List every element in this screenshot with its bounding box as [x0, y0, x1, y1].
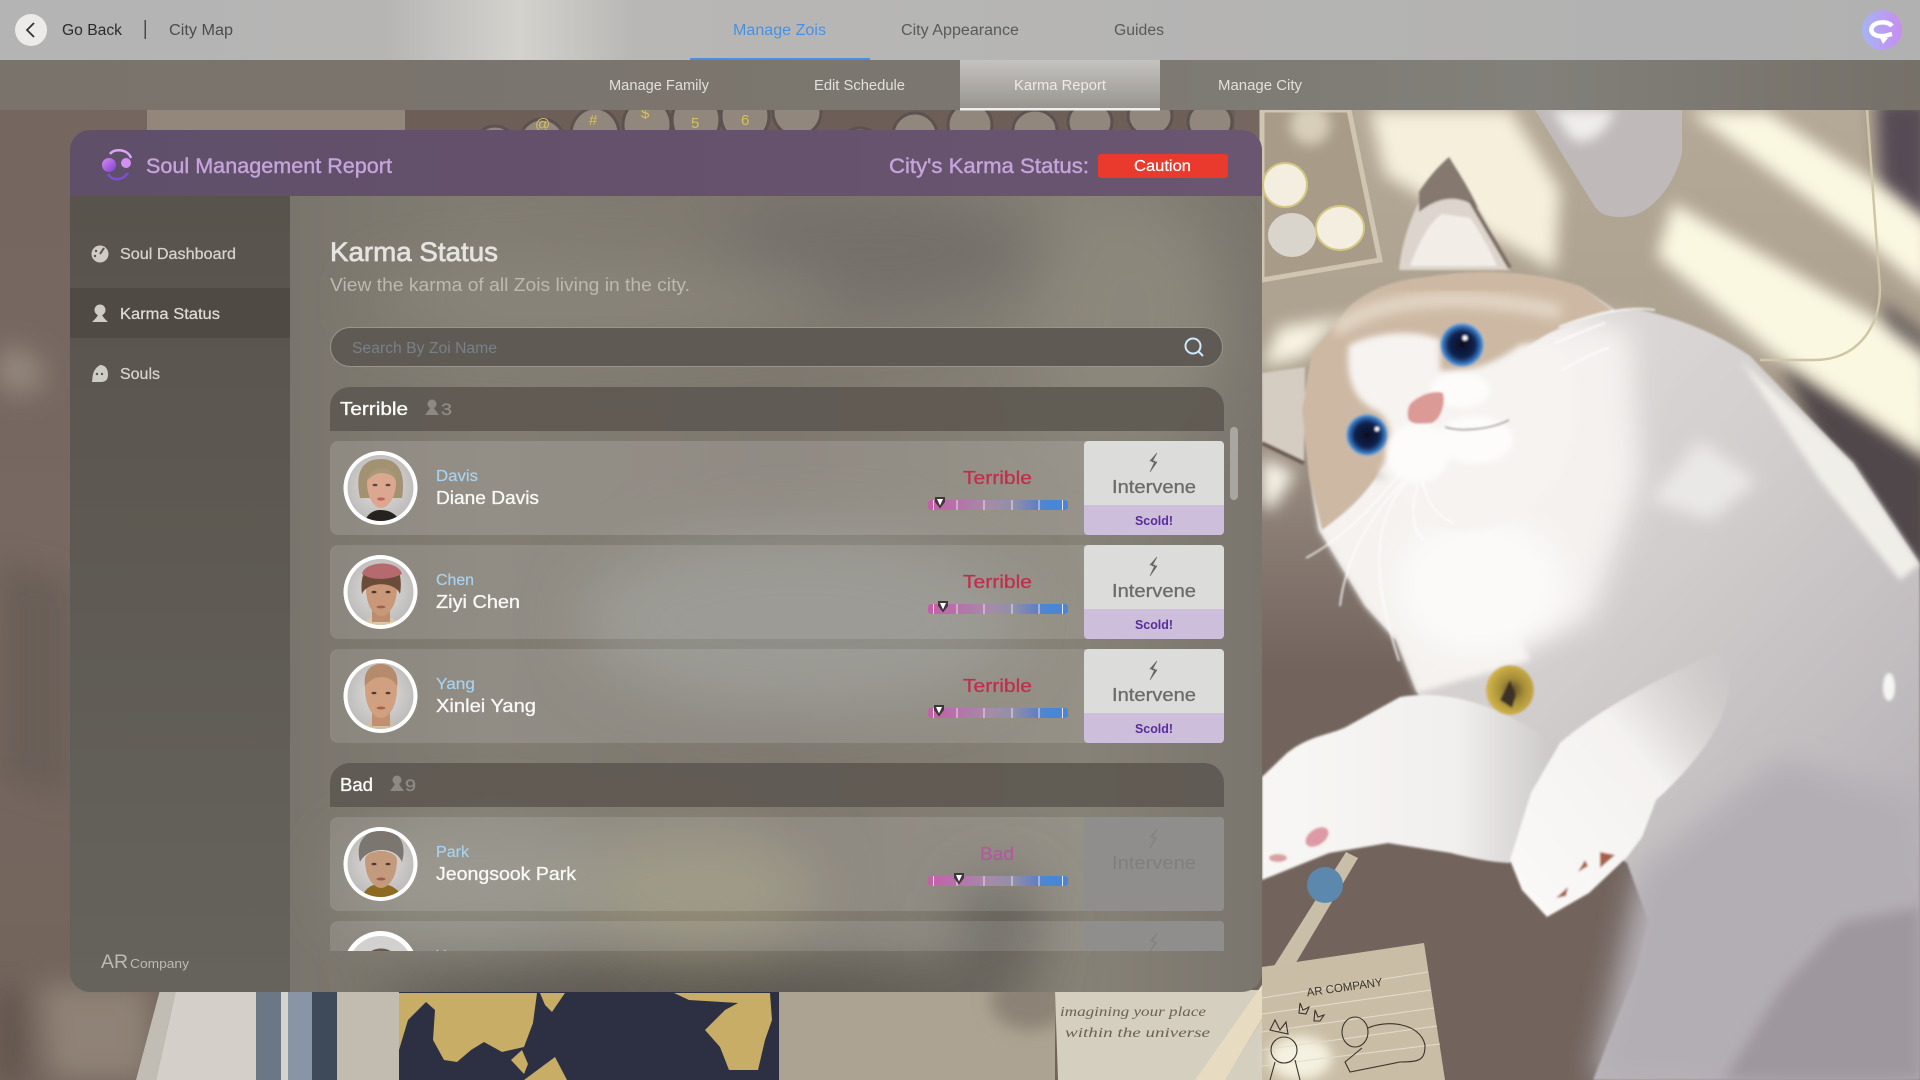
- menu: souls: Souls: [120, 366, 160, 383]
- row: partially visible: [330, 921, 1224, 1015]
- sidebar: [70, 196, 290, 996]
- row: ziyi chen: [330, 545, 1224, 639]
- group header: bad: 9: [405, 776, 416, 795]
- karma label: Bad: [980, 843, 1014, 864]
- disabled intervene button: Intervene: [1112, 852, 1196, 873]
- cat left arm and paw: [1262, 695, 1560, 880]
- karma bar: [928, 497, 1068, 510]
- city map label: City Map: [169, 22, 233, 39]
- intervene button: Intervene: [1112, 580, 1196, 601]
- note with drawing: AR COMPANY: [1306, 977, 1384, 999]
- cat face white: [1348, 333, 1580, 530]
- scrollbar: [1230, 427, 1238, 500]
- right keyboard corner and keys: [1262, 105, 1380, 280]
- top-left keyboard edge: #: [589, 112, 598, 129]
- sub navigation bar: [0, 60, 1920, 110]
- search box: [330, 328, 1222, 366]
- ar company logo: Company: [130, 956, 190, 971]
- menu: soul dashboard: Soul Dashboard: [120, 246, 236, 263]
- row: xinlei yang: [330, 649, 1224, 743]
- row: ziyi chen: Ziyi Chen: [436, 591, 520, 612]
- note with drawing: [1262, 943, 1445, 1080]
- bottom note with handwriting: imagining your place: [1060, 1005, 1206, 1020]
- top-left keyboard edge: [147, 88, 1235, 174]
- menu: karma status: Karma Status: [120, 306, 220, 323]
- pen: [1195, 852, 1358, 1080]
- caution pill: Caution: [1134, 158, 1191, 175]
- avatar: diane: [344, 451, 418, 525]
- intervene button: Scold!: [1135, 618, 1173, 632]
- group header: bad: Bad: [340, 774, 373, 795]
- avatar: ziyi: [344, 555, 418, 629]
- group header: terrible: [330, 387, 1224, 431]
- sub navigation bar: Manage Family: [609, 78, 710, 94]
- avatar: xinlei: [340, 658, 420, 738]
- sunlight stripes: [1262, 110, 1920, 510]
- row: partially visible: Y: [436, 948, 446, 965]
- desk cable: [1760, 110, 1880, 360]
- tab: manage zois: Manage Zois: [733, 22, 826, 39]
- intervene button: Intervene: [1112, 684, 1196, 705]
- top-left keyboard edge: 5: [691, 115, 699, 132]
- cat fur shading: [1593, 360, 1920, 1080]
- active tab highlight: [960, 60, 1160, 110]
- row: xinlei yang: Xinlei Yang: [436, 695, 536, 716]
- search box: Search By Zoi Name: [352, 340, 497, 357]
- report title: Soul Management Report: [146, 154, 392, 178]
- city karma status label: City's Karma Status:: [889, 155, 1089, 178]
- sub navigation bar: Manage City: [1218, 78, 1303, 94]
- app logo: [1862, 10, 1902, 50]
- panel: soul management report: [70, 130, 1262, 1040]
- cat tan mask: [1302, 272, 1612, 530]
- cat chest white: [1315, 310, 1640, 693]
- tab: guides: Guides: [1114, 22, 1164, 39]
- tab: city appearance: City Appearance: [901, 22, 1019, 39]
- right desk surface: [1262, 100, 1920, 1080]
- row: jeongsook park: Jeongsook Park: [436, 863, 577, 884]
- active menu highlight: [70, 288, 290, 338]
- main content background: [290, 140, 1262, 992]
- ar company logo: [101, 954, 189, 970]
- row: jeongsook park: Park: [436, 844, 469, 861]
- computer mouse: [1535, 110, 1682, 217]
- search icon: [1186, 338, 1203, 356]
- group header: terrible: Terrible: [340, 398, 408, 419]
- avatar: jeongsook: [340, 826, 420, 906]
- bottom note with handwriting: [1055, 990, 1262, 1080]
- dark desk shadows: [1660, 100, 1920, 600]
- intervene button: [1084, 649, 1224, 743]
- caution pill: [1098, 154, 1228, 178]
- go back label: Go Back: [62, 22, 122, 39]
- desk light and shadow on the left: [0, 345, 150, 1080]
- cat top ear: [1399, 157, 1510, 270]
- intervene button: Scold!: [1135, 514, 1173, 528]
- heading: karma status: Karma Status: [330, 237, 498, 267]
- row: ziyi chen: Chen: [436, 572, 474, 589]
- intervene button: Scold!: [1135, 722, 1173, 736]
- group header: bad: [330, 763, 1224, 807]
- group header: terrible: 3: [441, 400, 452, 419]
- top-left keyboard edge: $: [641, 105, 650, 122]
- row: diane davis: [330, 441, 1224, 535]
- karma bar: [928, 705, 1068, 718]
- cat right arm and paw: [1510, 650, 1729, 917]
- disabled intervene button: [1084, 817, 1224, 911]
- intervene button: [1084, 545, 1224, 639]
- sub navigation bar: Edit Schedule: [814, 78, 905, 94]
- row: xinlei yang: Yang: [436, 676, 475, 693]
- karma label: Terrible: [963, 675, 1032, 696]
- cat bell: [1486, 665, 1534, 715]
- menu: karma status: [92, 304, 220, 323]
- karma list: [330, 387, 1224, 951]
- menu: souls: [92, 365, 160, 383]
- row: diane davis: Diane Davis: [436, 487, 539, 508]
- karma label: Terrible: [963, 571, 1032, 592]
- sub navigation bar: Karma Report: [1014, 78, 1106, 94]
- top-left keyboard edge: @: [535, 116, 550, 133]
- bottom note with handwriting: within the universe: [1065, 1026, 1210, 1041]
- intervene button: Intervene: [1112, 476, 1196, 497]
- cat left ear: [1262, 367, 1305, 463]
- report logo: [102, 150, 131, 179]
- intervene button: [1084, 441, 1224, 535]
- cat body: [1302, 272, 1920, 1080]
- ar company logo: AR: [101, 952, 128, 973]
- top navigation bar: [0, 0, 1920, 60]
- back button: [15, 14, 47, 46]
- karma label: Terrible: [963, 467, 1032, 488]
- subtitle: View the karma of all Zois living in the city.: [330, 275, 690, 295]
- cat whiskers: [1306, 309, 1655, 661]
- karma bar: [928, 601, 1068, 614]
- cat muzzle: [1386, 372, 1513, 483]
- purple header strip: [70, 130, 1262, 196]
- top-left keyboard edge: 6: [741, 112, 749, 129]
- row: diane davis: Davis: [436, 468, 478, 485]
- row: jeongsook park: [330, 817, 1224, 911]
- bottom-left book with world map: [136, 970, 1070, 1080]
- cat illustration: [1262, 157, 1920, 1080]
- karma bar: [928, 873, 1068, 886]
- cat nose and mouth: [1408, 392, 1509, 430]
- cat eyes: [1346, 323, 1484, 456]
